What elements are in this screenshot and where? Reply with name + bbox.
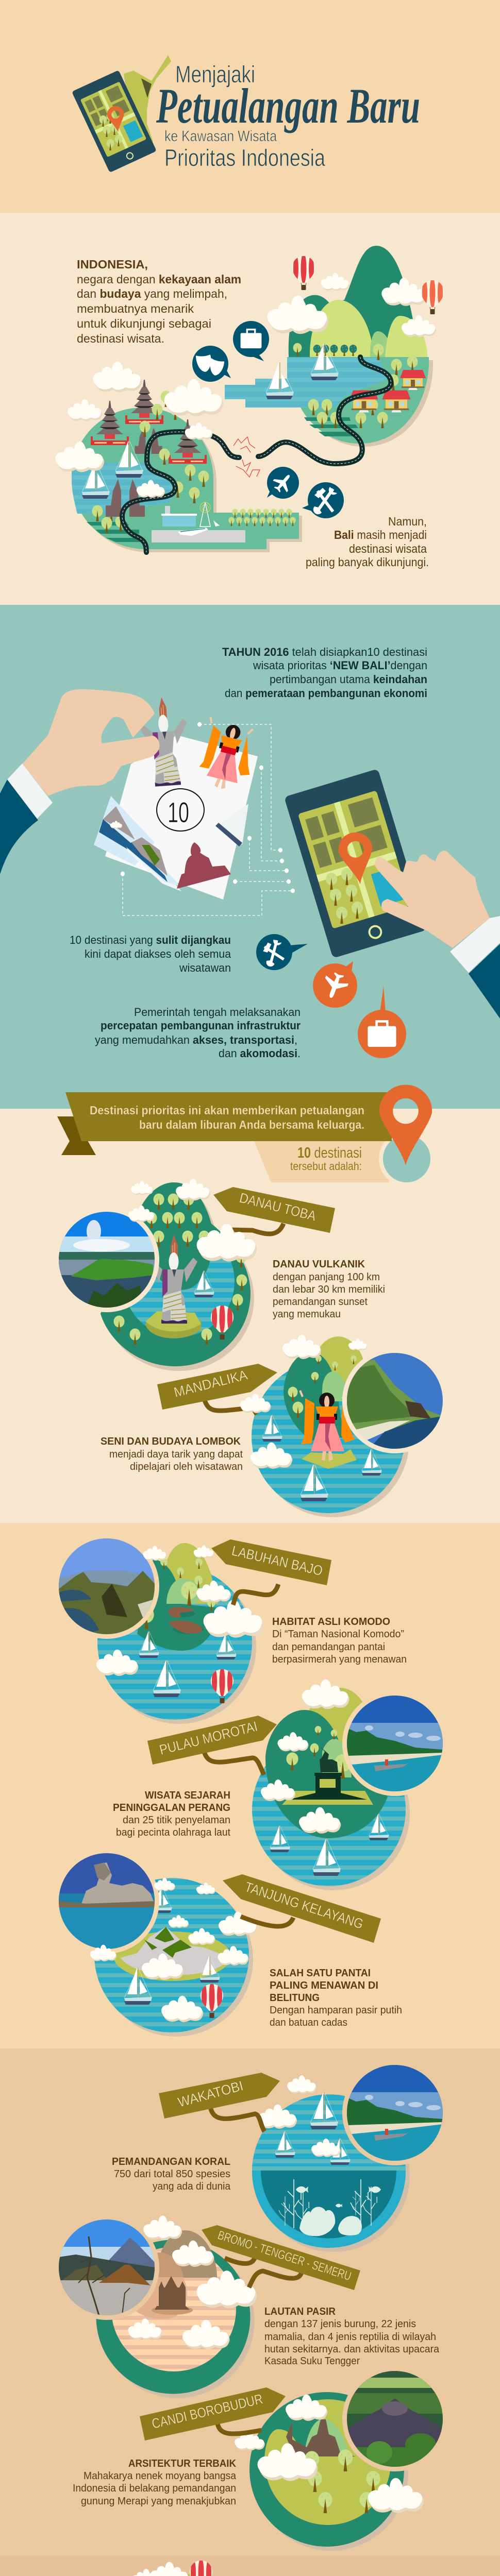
- corals and fish: [279, 2179, 381, 2236]
- icon: location pin: [379, 1084, 432, 1165]
- text: Danau Toba: dengan panjang 100 km: [273, 1272, 380, 1283]
- text: Tanjung Kelayang: BELITUNG: [270, 1992, 320, 2004]
- text: Labuhan Bajo: HABITAT ASLI KOMODO: [272, 1616, 390, 1628]
- text block: Bali: [306, 515, 429, 569]
- text: Bromo: mamalia, dan 4 jenis reptilia di wilayah: [264, 2331, 436, 2343]
- destination: Candi Borobudur: CANDI BOROBUDUR: [151, 2391, 264, 2432]
- text: Tanjung Kelayang: SALAH SATU PANTAI: [270, 1968, 371, 1979]
- text block: percepatan pembangunan: dan akomodasi.: [219, 1047, 301, 1060]
- text block: Indonesia intro: INDONESIA,: [77, 258, 148, 271]
- text: Danau Toba: dan lebar 30 km memiliki: [273, 1284, 385, 1295]
- text: Borobudur: gunung Merapi yang menakjubkan: [81, 2496, 236, 2507]
- text: Labuhan Bajo: dan pemandangan pantai: [272, 1641, 385, 1653]
- panel: sub-banner: [254, 1141, 392, 1182]
- destination: Mandalika: MANDALIKA: [172, 1367, 249, 1400]
- icon: speech bubble tools: [302, 482, 344, 518]
- text: Tanjung Kelayang: dan batuan cadas: [270, 2017, 347, 2028]
- destination: Bromo Tengger Semeru: [54, 2215, 360, 2398]
- text block: Indonesia intro: dan budaya yang melimpah,: [77, 287, 227, 300]
- text: Danau Toba: [273, 1259, 385, 1320]
- destination: Mandalika: [157, 1335, 447, 1517]
- doodle number 10: [157, 789, 204, 831]
- shirt cuff left: [7, 764, 53, 819]
- destination: Candi Borobudur: [140, 2366, 447, 2551]
- icon: speech bubble suitcase: [233, 321, 269, 361]
- text block: Bali: Bali masih menjadi: [334, 528, 427, 541]
- text block: Indonesia intro: membuatnya menarik: [77, 302, 194, 315]
- text: Mandalika: dipelajari oleh wisatawan: [130, 1461, 243, 1472]
- text: Pulau Morotai: dan 25 titik penyelaman: [123, 1815, 230, 1826]
- text: Wakatobi: [112, 2156, 231, 2192]
- text: Labuhan Bajo: berpasirmerah yang menawan: [272, 1654, 407, 1665]
- destination: Danau Toba: [54, 1179, 335, 1371]
- panel: banner ribbon: Destinasi prioritas ini akan memberikan petualangan: [90, 1104, 364, 1117]
- circle behind pin: [381, 1133, 432, 1184]
- illustration: Bali island: [55, 246, 444, 552]
- photo: Labuhan Bajo: [59, 1538, 155, 1634]
- icon: tools bubble: [256, 934, 308, 970]
- text block: Tahun 2016: pertimbangan utama keindahan: [270, 673, 427, 686]
- text: Pulau Morotai: [113, 1790, 230, 1838]
- text block: percepatan pembangunan: [95, 1006, 301, 1060]
- buddha silhouette: [177, 842, 231, 889]
- text block: sulit dijangkau: [70, 934, 231, 974]
- text: Wakatobi: yang ada di dunia: [153, 2181, 231, 2192]
- text block: Indonesia intro: destinasi wisata.: [77, 332, 164, 345]
- hand on tablet: [375, 851, 490, 948]
- photo: Mandalika: [347, 1353, 443, 1449]
- photo: Wakatobi: [347, 2065, 443, 2161]
- text block: percepatan pembangunan: yang memudahkan akses, transportasi,: [95, 1033, 297, 1046]
- text: Bromo: dengan 137 jenis burung, 22 jenis: [264, 2318, 416, 2330]
- text: Borobudur: Indonesia di belakang pemandangan: [73, 2483, 236, 2494]
- text block: percepatan pembangunan: percepatan pembangunan infrastruktur: [101, 1019, 301, 1032]
- icon: suitcase bubble: [358, 986, 406, 1058]
- text block: sulit dijangkau: wisatawan: [179, 961, 231, 974]
- shirt cuff right: [450, 916, 500, 973]
- text: Mandalika: SENI DAN BUDAYA LOMBOK: [101, 1436, 241, 1447]
- icon: speech bubble masks: [192, 346, 231, 382]
- text block: Indonesia intro: untuk dikunjungi sebagai: [77, 317, 211, 330]
- text block: Tahun 2016: wisata prioritas ‘NEW BALI’dengan: [253, 659, 427, 672]
- sailboat cutout: [215, 804, 248, 846]
- text block: percepatan pembangunan: Pemerintah tengah melaksanakan: [134, 1006, 301, 1019]
- destination: Pulau Morotai: [147, 1680, 447, 1890]
- photo cards: [94, 796, 181, 891]
- text: Bromo: hutan sekitarnya. dan aktivitas upacara: [264, 2344, 440, 2355]
- destination: Tanjung Kelayang: [54, 1849, 381, 2037]
- text block: Indonesia intro: negara dengan kekayaan alam: [77, 273, 241, 286]
- destination: Labuhan Bajo: LABUHAN BAJO: [230, 1543, 324, 1579]
- text block: Tahun 2016: dan pemerataan pembangunan ekonomi: [225, 687, 427, 700]
- text: Borobudur: Mahakarya nenek moyang bangsa: [84, 2470, 237, 2482]
- destination: Labuhan Bajo: [54, 1534, 331, 1724]
- destination: Tanjung Kelayang: TANJUNG KELAYANG: [243, 1879, 365, 1932]
- photo: Danau Toba: [59, 1212, 155, 1308]
- text: Mandalika: menjadi daya tarik yang dapat: [109, 1449, 243, 1460]
- text: Danau Toba: DANAU VULKANIK: [273, 1259, 365, 1270]
- text: Labuhan Bajo: [272, 1616, 407, 1665]
- text block: Bali: paling banyak dikunjungi.: [306, 555, 429, 569]
- text: Borobudur: ARSITEKTUR TERBAIK: [128, 2458, 237, 2469]
- destination: Bromo Tengger Semeru: BROMO - TENGGER - SEMERU: [216, 2228, 353, 2283]
- text block: Tahun 2016: TAHUN 2016 telah disiapkan10 destinasi: [222, 646, 427, 658]
- sleeve left: [0, 779, 38, 874]
- icon: speech bubble plane: [267, 467, 299, 499]
- title: Prioritas Indonesia: [164, 144, 325, 171]
- text: Danau Toba: pemandangan sunset: [273, 1296, 368, 1308]
- text: Borobudur: [73, 2458, 237, 2507]
- header icon: phone with map: [72, 55, 171, 173]
- title: Menjajaki: [175, 61, 255, 88]
- photo: Pulau Morotai: [347, 1696, 443, 1791]
- connector dots: [121, 722, 295, 893]
- panel: banner ribbon: baru dalam liburan Anda bersama keluarga.: [139, 1118, 364, 1131]
- icon: tablet with map: [284, 769, 427, 958]
- text: Tanjung Kelayang: [270, 1968, 402, 2028]
- text block: sulit dijangkau: 10 destinasi yang sulit dijangkau: [70, 934, 231, 946]
- destination: Tanjung Lesung: [133, 2561, 212, 2576]
- destination: Wakatobi: [159, 2060, 447, 2252]
- text: Tanjung Kelayang: PALING MENAWAN DI: [270, 1980, 378, 1991]
- panel: sub-banner: 10 destinasi: [297, 1145, 362, 1161]
- panel: banner ribbon tail: [57, 1116, 96, 1155]
- icon: dancer cutout: [194, 717, 261, 794]
- text block: Bali: destinasi wisata: [349, 542, 427, 555]
- photo: Borobudur: [347, 2371, 443, 2467]
- text: Mandalika: [101, 1436, 243, 1472]
- icon: man statue cutout: [138, 696, 191, 787]
- text block: sulit dijangkau: kini dapat diakses oleh semua: [85, 947, 231, 960]
- text: Bromo: [264, 2306, 440, 2367]
- text block: Tahun 2016: [222, 646, 427, 700]
- photo: Tanjung Kelayang: [59, 1853, 155, 1949]
- title: [156, 61, 420, 171]
- text: Wakatobi: 750 dari total 850 spesies: [114, 2168, 230, 2180]
- text: Pulau Morotai: bagi pecinta olahraga laut: [116, 1827, 230, 1838]
- text: Pulau Morotai: WISATA SEJARAH: [145, 1790, 230, 1801]
- text: Tanjung Kelayang: Dengan hamparan pasir putih: [270, 2005, 402, 2016]
- hand holding statue: [22, 689, 160, 796]
- icon: plane bubble: [313, 961, 357, 1008]
- text block: Indonesia intro: [77, 258, 241, 345]
- text block: Bali: Namun,: [388, 515, 427, 528]
- destination: Danau Toba: DANAU TOBA: [238, 1190, 318, 1224]
- text: Bromo: Kasada Suku Tengger: [264, 2355, 360, 2367]
- illustration: paper with destinations: [22, 689, 295, 916]
- photo: Bromo: [59, 2219, 155, 2315]
- text: Danau Toba: yang memukau: [273, 1309, 341, 1320]
- destination: Wakatobi: WAKATOBI: [176, 2078, 245, 2110]
- text: Labuhan Bajo: Di “Taman Nasional Komodo”: [272, 1629, 404, 1640]
- destination: Pulau Morotai: PULAU MOROTAI: [158, 1719, 259, 1758]
- title: ke Kawasan Wisata: [164, 128, 277, 145]
- dashed connectors: [123, 724, 293, 916]
- doodle number 10: 10: [168, 796, 189, 828]
- text: Bromo: LAUTAN PASIR: [264, 2306, 336, 2317]
- text: Pulau Morotai: PENINGGALAN PERANG: [113, 1802, 230, 1814]
- panel: sub-banner: tersebut adalah:: [290, 1160, 362, 1173]
- panel: banner ribbon: [65, 1092, 392, 1141]
- sleeve right: [469, 944, 500, 1019]
- text: Wakatobi: PEMANDANGAN KORAL: [112, 2156, 230, 2167]
